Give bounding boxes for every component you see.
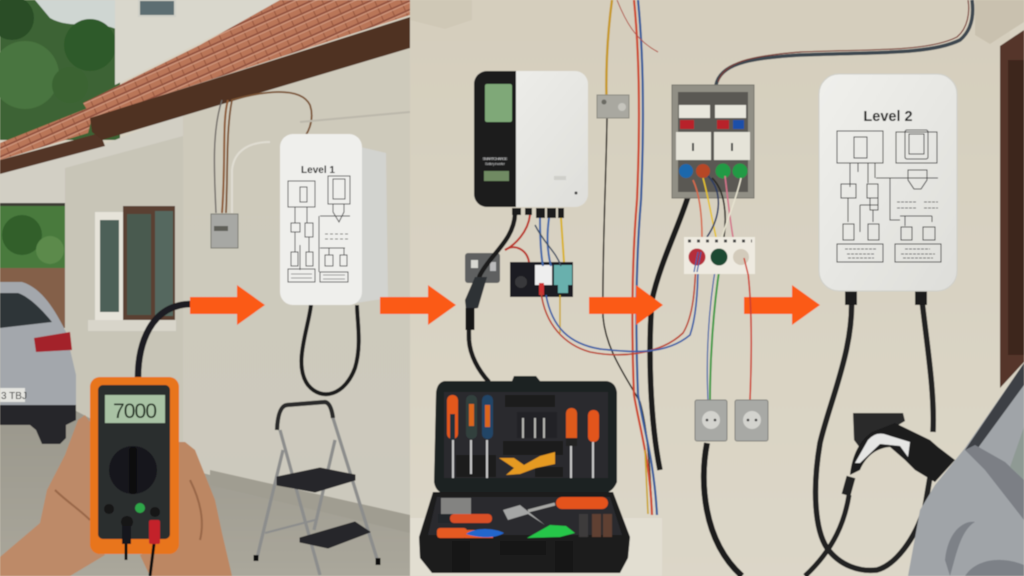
Level 2 charger cables: [805, 291, 933, 576]
multimeter dial: [109, 446, 157, 494]
left wall: [65, 132, 183, 472]
Level 2 label: Level 2: [863, 109, 913, 125]
wall ledge: [410, 518, 662, 576]
arrow 4: [744, 285, 820, 325]
screwdrivers in lid: [447, 395, 599, 478]
wall cable bundles: [603, 0, 973, 515]
input lead cable to multimeter: [138, 304, 192, 378]
porch beam: [0, 203, 65, 206]
curb: [210, 470, 410, 533]
main side wall: [183, 30, 410, 520]
step ladder: [256, 402, 378, 575]
Level 1 wiring diagram: [288, 176, 350, 282]
trees and sky: [0, 0, 120, 328]
multimeter screen: [105, 395, 165, 423]
door frame: [1000, 30, 1024, 388]
inverter display: [485, 84, 512, 122]
lower-left fascia: [0, 133, 105, 174]
inverter wiring: [465, 214, 751, 400]
toolbox: [419, 376, 630, 573]
hands holding multimeter: [0, 415, 232, 576]
arrow 2: [380, 285, 456, 325]
main roof fascia: [90, 17, 410, 140]
terminal block: [684, 237, 755, 274]
parked car: 3 TBJ: [1, 391, 27, 402]
mounting bracket: [597, 95, 629, 118]
inverter cable glands: [512, 208, 564, 218]
inverter: Battery inverter: [485, 161, 506, 166]
ground-floor window: [88, 206, 176, 331]
multimeter ports and leads: [104, 503, 160, 576]
bits tray: [441, 498, 471, 514]
parked car: [0, 282, 76, 444]
toolbox base: [419, 492, 630, 573]
main roof tiles: [83, 0, 410, 118]
wall corner trim: [975, 0, 1024, 44]
panel to terminal wiring: [693, 176, 741, 238]
top-left bracket: [410, 0, 472, 29]
upper window: [139, 0, 175, 16]
ground: [0, 405, 410, 576]
outlet cable: [704, 443, 742, 576]
ceiling wiring, left: [214, 92, 410, 213]
inverter: [474, 71, 588, 207]
soffit: [0, 113, 183, 206]
lower-left roof tiles: [0, 108, 92, 160]
breaker panel: [672, 85, 754, 198]
socket terminal block: [510, 262, 573, 297]
EV charging connector: [850, 413, 955, 482]
Level 2 charger: [819, 74, 957, 291]
base tools: [437, 497, 612, 538]
outlets: [695, 400, 768, 441]
multimeter reading: 7000: [113, 400, 157, 423]
orange crimper: [499, 452, 555, 475]
Level 2 wiring diagram: [837, 130, 941, 262]
Level 1 charger: [280, 134, 388, 305]
upper wall of house: [115, 0, 285, 85]
car at right: [908, 363, 1024, 576]
Level 1 charger cables: [301, 305, 359, 394]
wall socket: [465, 253, 500, 283]
central wall: [410, 0, 1010, 576]
arrow 3: [589, 285, 663, 325]
junction box: [211, 214, 238, 248]
Level 1 label: Level 1: [301, 165, 335, 176]
inverter brand text: SMARTCHARGE: [482, 156, 508, 161]
multimeter: [90, 377, 179, 576]
arrow 1: [190, 285, 265, 325]
toolbox lid: [434, 376, 617, 494]
